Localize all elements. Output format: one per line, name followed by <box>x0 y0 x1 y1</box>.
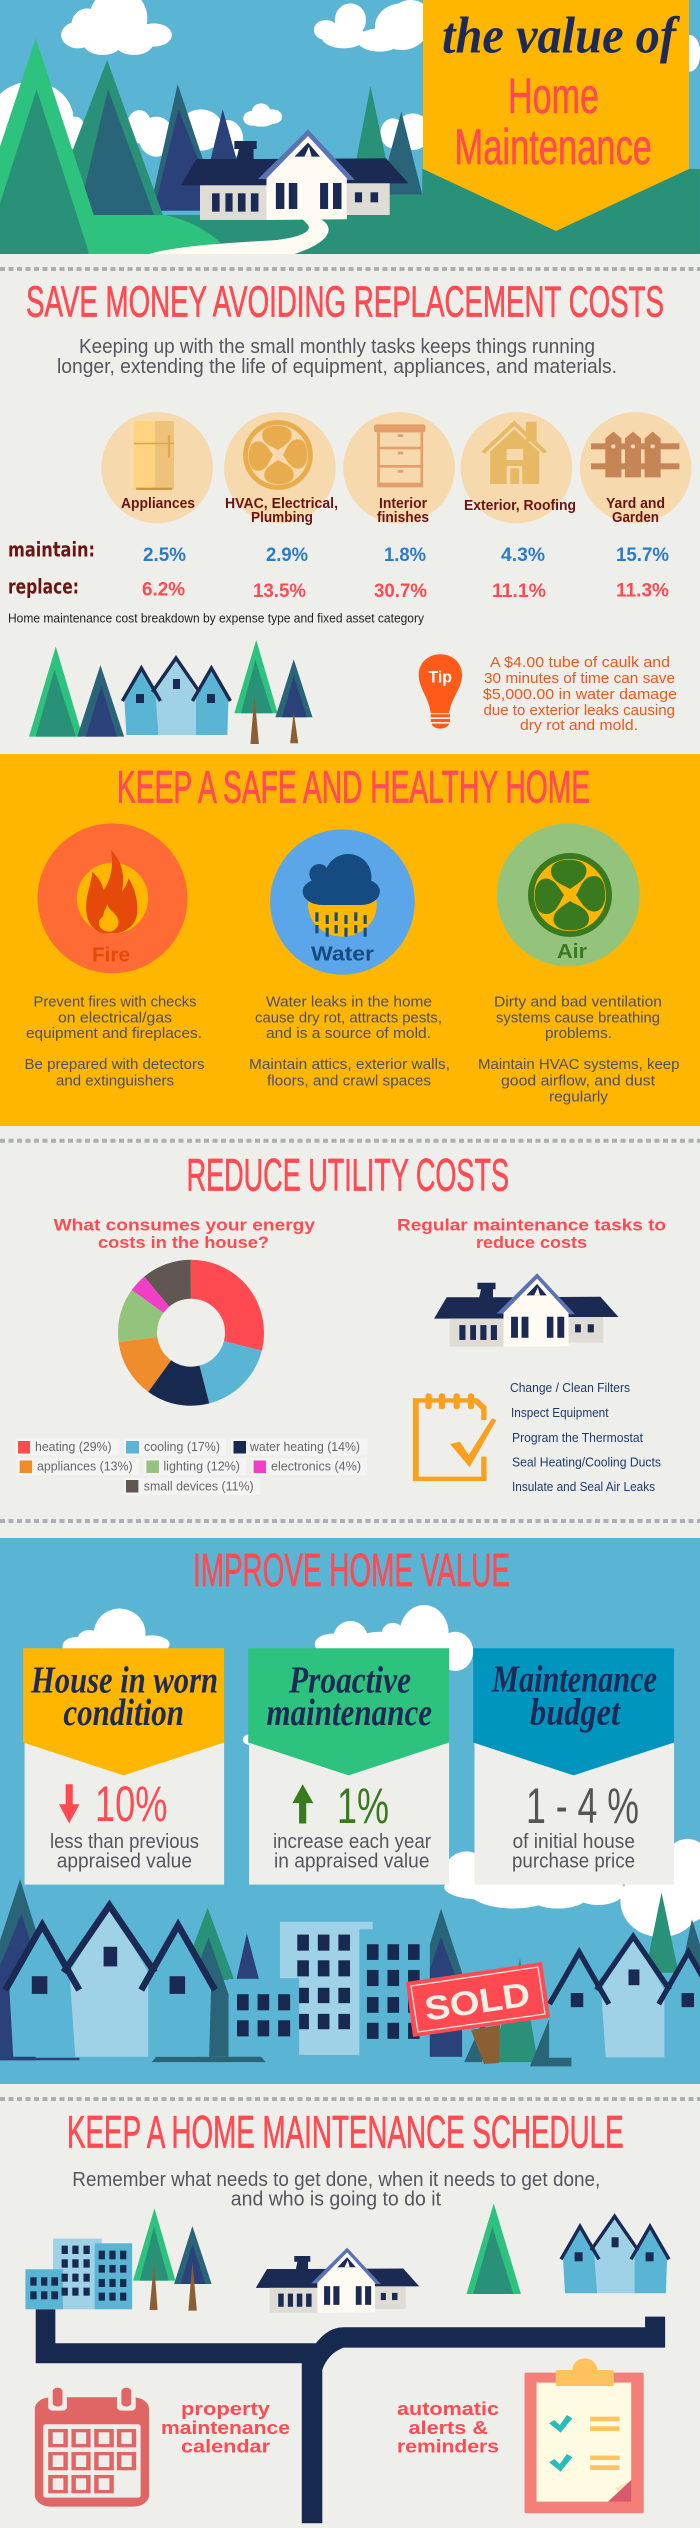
card: worn condition: less than previous <box>50 1831 199 1853</box>
tip text <box>483 654 677 734</box>
intro text <box>57 336 617 378</box>
category labels: Exterior, Roofing <box>464 498 576 514</box>
row: maintain percentages: 2.5% <box>143 545 186 566</box>
task list: Change / Clean Filters <box>510 1380 630 1395</box>
icon: fire <box>37 823 187 973</box>
chart legend <box>16 1438 367 1495</box>
category labels <box>121 496 665 526</box>
task list: Seal Heating/Cooling Ducts <box>512 1455 661 1470</box>
donut chart <box>138 1279 244 1386</box>
label: calendar: maintenance <box>161 2418 290 2438</box>
task list <box>510 1380 661 1494</box>
icon: tip light bulb <box>419 654 462 729</box>
chart legend: heating (29%) <box>35 1439 112 1454</box>
chart legend: electronics (4%) <box>271 1459 361 1474</box>
text: water: Water leaks in the home <box>266 994 432 1011</box>
sign: sold <box>406 1962 550 2064</box>
city illustration: clouds, trees and buildings <box>0 1605 700 2066</box>
chart legend: appliances (13%) <box>37 1459 133 1474</box>
category labels: Plumbing <box>251 510 313 526</box>
icon: exterior house <box>483 422 546 484</box>
subheading: energy: costs in the house? <box>98 1233 269 1252</box>
card: worn condition: appraised value <box>57 1850 192 1872</box>
icon: calendar <box>35 2388 149 2507</box>
chart legend: small devices (11%) <box>144 1479 254 1494</box>
text: fire: Prevent fires with checks <box>34 994 196 1011</box>
card: maintenance budget: budget <box>530 1692 621 1734</box>
text: air: regularly <box>549 1089 609 1106</box>
text: air: systems cause breathing <box>496 1010 660 1027</box>
schedule text <box>72 2169 600 2211</box>
panel: reduce utility costs <box>16 1150 666 1495</box>
text: fire: and extinguishers <box>56 1073 174 1090</box>
card: worn condition: House in worn <box>30 1660 218 1702</box>
panel: hero illustration <box>0 0 700 254</box>
icon: water: Water <box>311 944 374 966</box>
schedule text: Remember what needs to get done, when it needs to get done, <box>72 2169 600 2191</box>
schedule text: and who is going to do it <box>231 2189 441 2211</box>
icon: fire: Fire <box>92 945 130 967</box>
banner <box>423 0 689 231</box>
label: alerts: alerts & <box>408 2418 488 2438</box>
icons: category circles <box>101 412 691 523</box>
chart legend: water heating (14%) <box>249 1439 360 1454</box>
row: maintain percentages: 1.8% <box>384 545 426 566</box>
illustration: buildings and trees <box>25 2203 521 2311</box>
subheading: energy <box>54 1216 316 1252</box>
text: air: problems. <box>545 1025 612 1042</box>
chart legend: lighting (12%) <box>163 1459 240 1474</box>
row: maintain percentages: maintain: <box>8 538 95 562</box>
illustration: house <box>434 1273 618 1347</box>
label: alerts <box>397 2399 499 2457</box>
panel: maintenance schedule <box>25 2107 669 2523</box>
label: alerts: reminders <box>397 2437 499 2457</box>
card: worn condition <box>23 1648 224 1885</box>
icon: clipboard <box>525 2358 644 2513</box>
label: alerts: automatic <box>397 2399 499 2419</box>
label: calendar <box>161 2399 290 2457</box>
chart legend: cooling (17%) <box>144 1439 220 1454</box>
illustration: trees <box>29 640 312 744</box>
icon: tip light bulb: Tip <box>428 668 452 687</box>
card: worn condition: 10% <box>95 1776 167 1832</box>
card: proactive maintenance <box>248 1648 449 1885</box>
text: air <box>478 994 680 1106</box>
intro text: Keeping up with the small monthly tasks keeps things running <box>79 336 595 358</box>
card: proactive maintenance: 1% <box>337 1778 389 1834</box>
card: proactive maintenance: maintenance <box>266 1692 432 1734</box>
icon: fence <box>591 432 679 477</box>
road <box>36 2309 665 2523</box>
illustration: left houses <box>5 1905 215 2057</box>
subheading: tasks: Regular maintenance tasks to <box>397 1216 666 1235</box>
subheading: energy: What consumes your energy <box>54 1216 316 1235</box>
card: maintenance budget <box>473 1648 674 1885</box>
title: Home: Home <box>508 68 599 124</box>
text: water: Maintain attics, exterior walls, <box>249 1056 450 1073</box>
task list: Program the Thermostat <box>512 1430 643 1445</box>
card: proactive maintenance: in appraised value <box>274 1850 430 1872</box>
text: fire: Be prepared with detectors <box>24 1056 204 1073</box>
illustration: houses <box>561 2216 669 2293</box>
hero scene: clouds, trees and house <box>0 0 700 254</box>
panel: safe and healthy home <box>0 754 700 1126</box>
icon: checklist <box>413 1393 496 1481</box>
text: air: good airflow, and dust <box>501 1073 656 1090</box>
text: water <box>249 994 450 1090</box>
panel: improve home value <box>0 1538 700 2084</box>
row: replace percentages: 6.2% <box>142 580 185 601</box>
subheading: tasks: reduce costs <box>476 1233 587 1252</box>
card: maintenance budget: of initial house <box>512 1831 635 1853</box>
illustration: house <box>256 2248 419 2313</box>
row: maintain percentages: 15.7% <box>616 545 669 566</box>
row: replace percentages: 13.5% <box>253 581 306 602</box>
tip text: 30 minutes of time can save <box>484 670 675 687</box>
tip text: due to exterior leaks causing <box>484 702 675 719</box>
label: calendar: calendar <box>181 2437 270 2457</box>
task list: Inspect Equipment <box>511 1405 609 1420</box>
category labels: Yard and <box>606 496 665 512</box>
card: worn condition: condition <box>63 1692 184 1734</box>
text: water: cause dry rot, attracts pests, <box>255 1010 442 1027</box>
row: replace percentages <box>8 574 669 602</box>
icon: air <box>497 824 640 966</box>
text: fire: on electrical/gas <box>58 1010 172 1027</box>
category labels: Appliances <box>121 496 195 512</box>
row: maintain percentages <box>8 538 669 566</box>
icon: air: Air <box>557 941 587 963</box>
category labels: finishes <box>377 510 429 526</box>
text: air: Maintain HVAC systems, keep <box>478 1056 680 1073</box>
card: proactive maintenance: Proactive <box>288 1660 411 1702</box>
panel: save money <box>8 278 691 744</box>
tip text: A $4.00 tube of caulk and <box>490 654 670 671</box>
row: replace percentages: 11.3% <box>616 580 669 601</box>
text: water: floors, and crawl spaces <box>267 1073 431 1090</box>
card: maintenance budget: Maintenance <box>491 1658 657 1700</box>
task list: Insulate and Seal Air Leaks <box>512 1479 655 1494</box>
row: replace percentages: 30.7% <box>374 581 427 602</box>
label: calendar: property <box>181 2399 270 2419</box>
card: maintenance budget: purchase price <box>512 1850 635 1872</box>
text: air: Dirty and bad ventilation <box>494 994 662 1011</box>
text: fire: equipment and fireplaces. <box>26 1025 202 1042</box>
tip text: $5,000.00 in water damage <box>483 686 677 703</box>
icon: fridge <box>134 421 174 490</box>
icon: water <box>270 829 415 975</box>
text: fire <box>24 994 204 1090</box>
card: maintenance budget: 1 - 4 % <box>526 1778 639 1834</box>
card: proactive maintenance: increase each year <box>273 1831 431 1853</box>
icon: dresser <box>374 424 425 487</box>
title: the value of: the value of <box>442 8 680 65</box>
category labels: Interior <box>379 496 427 512</box>
sign: sold: SOLD <box>422 1976 533 2029</box>
row: maintain percentages: 2.9% <box>266 545 308 566</box>
icon: fan <box>246 423 310 487</box>
intro text: longer, extending the life of equipment, appliances, and materials. <box>57 356 617 378</box>
caption: Home maintenance cost breakdown by expense type and fixed asset category <box>8 611 424 626</box>
tip text: dry rot and mold. <box>520 717 638 734</box>
category labels: Garden <box>612 510 659 526</box>
category labels: HVAC, Electrical, <box>225 496 338 512</box>
illustration: houses <box>122 658 230 735</box>
row: replace percentages: 11.1% <box>492 581 546 602</box>
row: maintain percentages: 4.3% <box>501 545 545 566</box>
row: replace percentages: replace: <box>8 574 79 598</box>
text: water: and is a source of mold. <box>266 1025 431 1042</box>
illustration: right houses <box>550 1937 700 2057</box>
subheading: tasks <box>397 1216 666 1252</box>
